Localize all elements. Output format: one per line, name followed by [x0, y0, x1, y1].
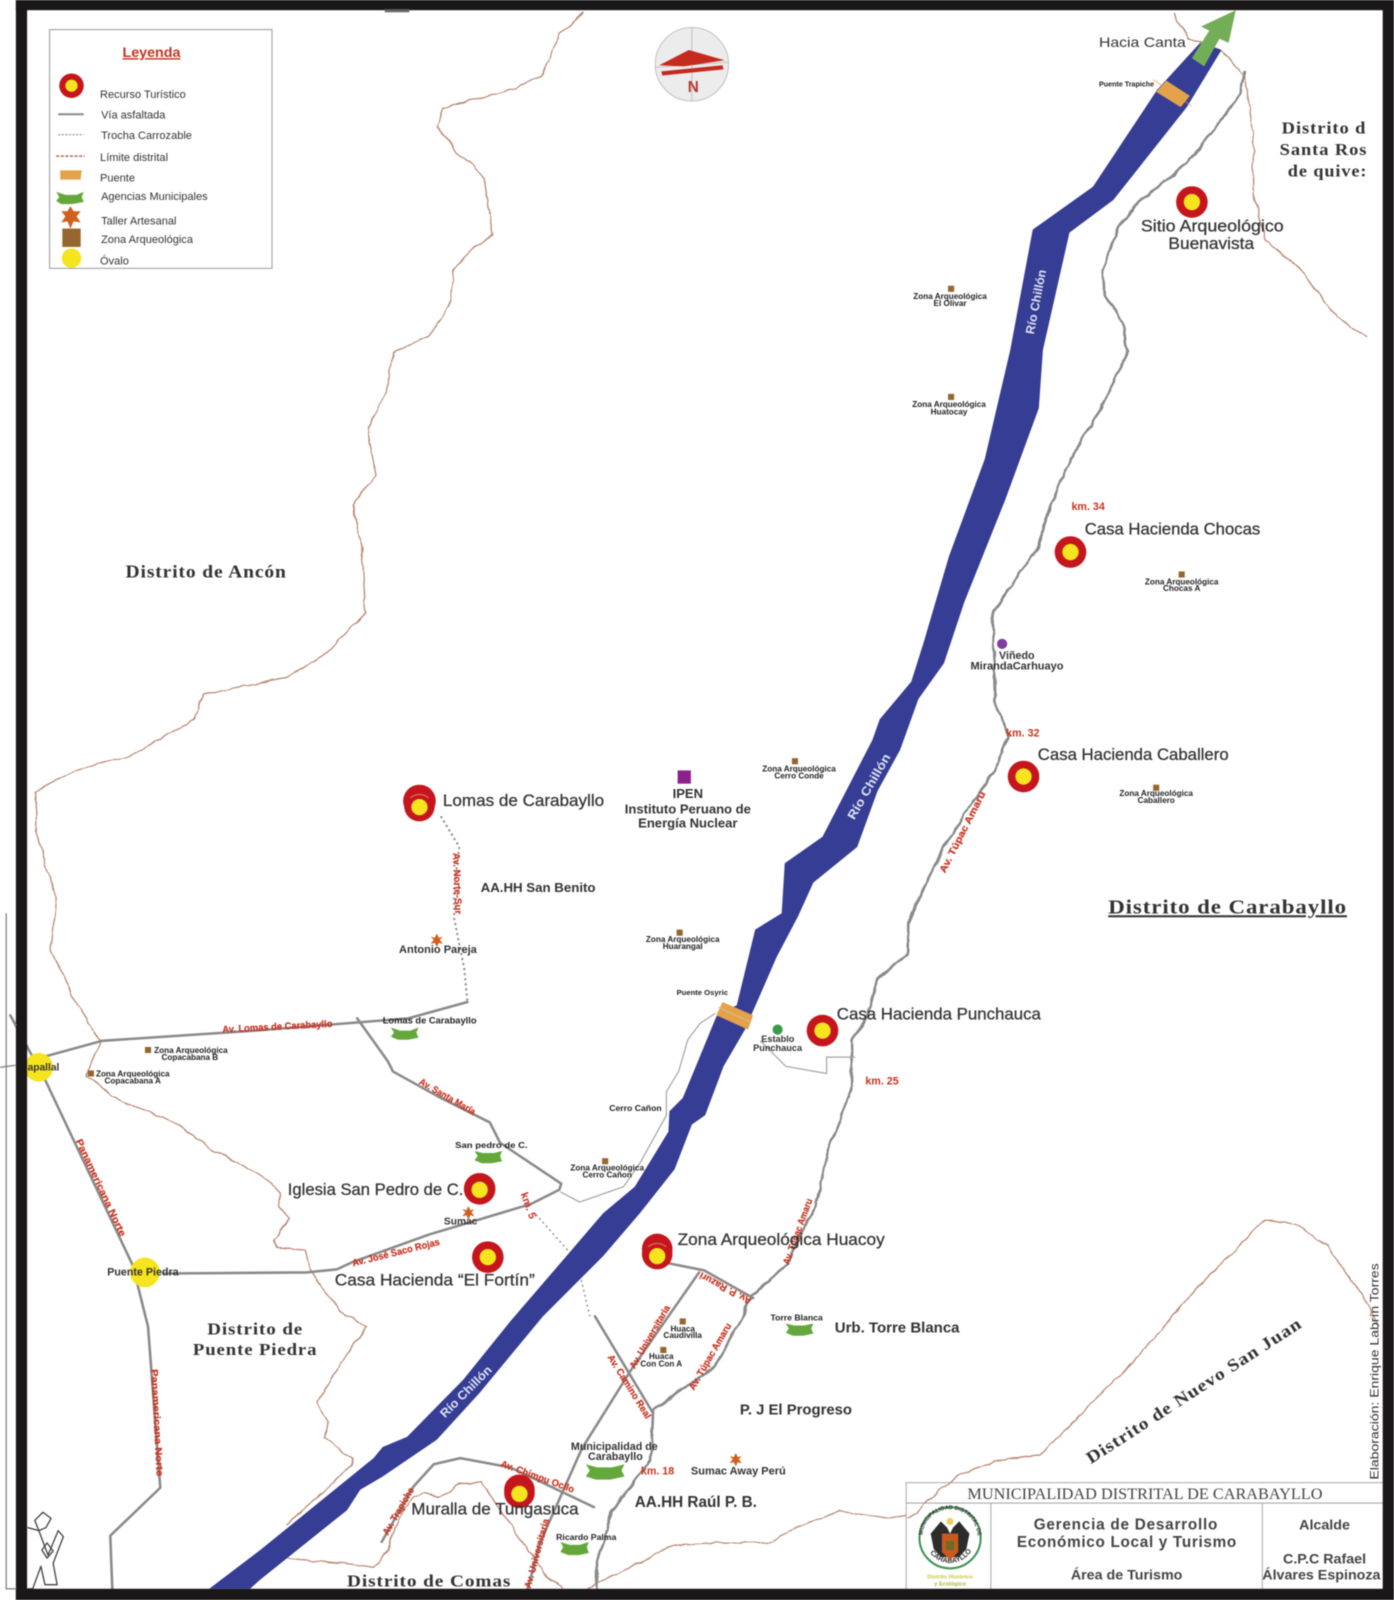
- river label centre: Río Chillón: [845, 751, 893, 822]
- legend: trocha carrozable: Trocha Carrozable: [101, 130, 192, 142]
- road labels: km. 18: [641, 1465, 674, 1477]
- municipal agencies: [383, 1015, 823, 1555]
- tourist resource: Chocas: Casa Hacienda Chocas: [1085, 521, 1260, 539]
- legend: límite distrital: Límite distrital: [100, 152, 168, 164]
- archaeological zones: [88, 286, 1219, 1368]
- Viñedo Miranda Carhuayo: MirandaCarhuayo: [970, 660, 1064, 672]
- Viñedo Miranda Carhuayo: [970, 639, 1064, 672]
- road labels: Panamericana Norte: [73, 1137, 128, 1239]
- agency: Municipalidad de Carabayllo: Municipalidad de: [571, 1441, 658, 1453]
- management heading: [1017, 1517, 1236, 1584]
- mayor details: Alcalde: [1299, 1518, 1350, 1534]
- road labels: [73, 501, 1105, 1590]
- workshops: [399, 934, 786, 1477]
- IPEN icon and label: [625, 770, 751, 831]
- legend: puente: [60, 170, 135, 185]
- logo: municipal shield: CARABAYLLO: [930, 1548, 972, 1564]
- agency: Lomas de Carabayllo: [383, 1015, 477, 1040]
- management heading: Gerencia de Desarrollo: [1034, 1517, 1217, 1534]
- road labels: Panamericana Norte: [148, 1369, 165, 1477]
- arrow: towards Canta: [1192, 10, 1236, 66]
- agency: Torre Blanca: Torre Blanca: [770, 1312, 823, 1322]
- district: Santa Rosa de Quives: Santa Ros: [1280, 140, 1367, 159]
- archaeological zones: Caudivilla: [663, 1331, 702, 1340]
- road labels: Av. Chimpu Ocllo: [499, 1459, 576, 1496]
- tourist resource: Tungasuca: Muralla de Tungasuca: [411, 1500, 580, 1518]
- legend: [50, 30, 272, 268]
- legend: óvalo: [62, 248, 129, 268]
- archaeological zones: Huaca: [670, 1325, 695, 1334]
- legend: vía asfaltada: [58, 109, 166, 121]
- tourist resource: Punchauca: [807, 1005, 1042, 1046]
- district: Santa Rosa de Quives: Distrito d: [1282, 119, 1366, 138]
- tourist resource: Lomas de Carabayllo: Lomas de Carabayllo: [443, 792, 604, 810]
- legend: taller artesanal: Taller Artesanal: [101, 215, 176, 227]
- tourist resource: Buenavista: [1141, 186, 1284, 253]
- district: Puente Piedra: Distrito de: [207, 1320, 303, 1339]
- district: Nuevo San Juan: Distrito de Nuevo San Juan: [1083, 1314, 1305, 1468]
- tourist resource: Huacoy: [642, 1231, 886, 1269]
- road labels: Av. Túpac Amaru: [938, 790, 988, 875]
- archaeological zones: Huarangal: [663, 942, 703, 951]
- ovalo: Capallal: apallal: [28, 1062, 59, 1073]
- Cerro Cañon: Cerro Cañon: [609, 1103, 662, 1113]
- workshop: Sumac Away Perú: Sumac Away Perú: [691, 1465, 786, 1477]
- logo: municipal shield: Distrito Histórico: [927, 1575, 973, 1581]
- road labels: Av. Camino Real: [605, 1353, 653, 1421]
- agency: San Pedro de C.: San pedro de C.: [455, 1140, 528, 1150]
- archaeological zones: Huaca: [649, 1352, 674, 1361]
- archaeological zones: Copacabana A: [105, 1077, 161, 1086]
- legend: vía asfaltada: Vía asfaltada: [101, 109, 166, 121]
- IPEN icon and label: Instituto Peruano de: [625, 801, 751, 816]
- archaeological zones: Caballero: [1138, 796, 1175, 805]
- road labels: Av. Universitaria: [523, 1517, 552, 1590]
- legend: agencias municipales: Agencias Municipales: [101, 191, 208, 203]
- tourist resource: Tungasuca: [411, 1474, 580, 1518]
- legend: recurso turístico: Recurso Turístico: [100, 89, 186, 101]
- tourist resource: El Fortín: [335, 1241, 535, 1290]
- road labels: Av. José Saco Rojas: [351, 1237, 441, 1269]
- archaeological zones: Chocas A: [1163, 584, 1200, 593]
- Urb. Torre Blanca: Urb. Torre Blanca: [835, 1320, 960, 1337]
- Establo Punchauca: Establo: [761, 1034, 795, 1044]
- archaeological zones: Huatocay: [931, 407, 968, 416]
- workshop: Sumac Away Perú: [691, 1453, 786, 1477]
- tourist resource: Caballero: Casa Hacienda Caballero: [1038, 746, 1229, 764]
- archaeological zones: Zona Arqueológica: [646, 935, 720, 944]
- legend: agencias municipales: [56, 191, 208, 204]
- agency: Municipalidad de Carabayllo: [571, 1441, 658, 1480]
- P. J El Progreso: P. J El Progreso: [740, 1402, 852, 1418]
- tourist resource: Buenavista: Buenavista: [1168, 235, 1255, 253]
- road labels: Av. Túpac Amaru: [781, 1197, 815, 1266]
- district: Comas: Distrito de Comas: [347, 1572, 511, 1591]
- archaeological zones: Zona Arqueológica: [912, 400, 986, 409]
- workshop: Sumac: [444, 1206, 478, 1227]
- road labels: Av. P. Razuri: [698, 1270, 754, 1306]
- mayor details: C.P.C Rafael: [1283, 1551, 1366, 1567]
- mayor details: [1262, 1518, 1382, 1584]
- road labels: km. 5: [518, 1191, 538, 1221]
- tourist resource: Punchauca: Casa Hacienda Punchauca: [837, 1005, 1042, 1023]
- workshop: Sumac: Sumac: [444, 1216, 478, 1227]
- author credit: Elaboración: Enrique Labrín Torres: [1369, 1263, 1382, 1480]
- bridge: Puente Osyric: Puente Osyric: [677, 988, 729, 997]
- legend: zona arqueológica: [62, 229, 194, 247]
- district: Santa Rosa de Quives: de quive:: [1288, 162, 1367, 181]
- road labels: Av. Norte-Sur: [450, 853, 463, 915]
- road labels: km. 34: [1071, 501, 1105, 513]
- road labels: Av. Trapiche: [381, 1485, 417, 1537]
- archaeological zones: Cerro Conde: [774, 772, 824, 781]
- archaeological zones: Zona Arqueológica: [1145, 578, 1219, 587]
- tourist resource: Iglesia San Pedro: Iglesia San Pedro de C.: [288, 1181, 463, 1199]
- ovalo: Puente Piedra: Puente Piedra: [107, 1267, 180, 1279]
- archaeological zones: Con Con A: [640, 1359, 682, 1368]
- tourist resource: Iglesia San Pedro: [288, 1173, 495, 1205]
- archaeological zones: Zona Arqueológica: [570, 1163, 644, 1172]
- legend: óvalo: Óvalo: [100, 254, 129, 267]
- district: Santa Rosa de Quives: [1280, 119, 1367, 181]
- river label north: Río Chillón: [1023, 268, 1049, 335]
- road labels: km. 32: [1006, 728, 1040, 740]
- district: Puente Piedra: Puente Piedra: [193, 1340, 317, 1359]
- mayor details: Álvares Espinoza: [1262, 1567, 1382, 1584]
- AA.HH San Benito: AA.HH San Benito: [481, 880, 596, 895]
- logo: municipal shield: y Ecológico: [934, 1582, 966, 1588]
- legend: límite distrital: [56, 152, 168, 164]
- agency: Municipalidad de Carabayllo: Carabayllo: [588, 1451, 643, 1463]
- bridge: Puente Trapiche: Puente Trapiche: [1099, 81, 1154, 89]
- legend title: Leyenda: [123, 45, 181, 61]
- logo: municipal shield: [918, 1504, 982, 1588]
- legend: puente: Puente: [100, 173, 135, 185]
- ovalo: Puente Piedra: [107, 1258, 180, 1287]
- Establo Punchauca: Punchauca: [753, 1043, 803, 1053]
- label: Hacia Canta: Hacia Canta: [1099, 35, 1186, 51]
- compass: north: N: [688, 79, 699, 96]
- archaeological zones: El Olivar: [934, 299, 967, 308]
- road labels: Av. Santa María: [417, 1077, 478, 1118]
- logo: municipal shield: MUNICIPALIDAD DISTRITAL DE: [918, 1504, 982, 1536]
- river label south: Río Chillón: [437, 1363, 495, 1420]
- frame: outer grey edge: [0, 913, 16, 1589]
- archaeological zones: Copacabana B: [162, 1053, 218, 1062]
- IPEN icon and label: IPEN: [673, 786, 703, 801]
- road labels: Av. Universitaria: [628, 1303, 673, 1371]
- AA.HH Raúl P. B.: AA.HH Raúl P. B.: [635, 1494, 757, 1511]
- archaeological zones: Zona Arqueológica: [762, 764, 836, 773]
- road labels: Av. Túpac Amaru: [687, 1321, 734, 1392]
- legend: trocha carrozable: [58, 130, 192, 142]
- workshop: Antonio Pareja: [399, 934, 478, 956]
- archaeological zones: Zona Arqueológica: [154, 1046, 228, 1055]
- icon: hiker: [28, 1512, 63, 1589]
- district: Puente Piedra: [193, 1320, 317, 1359]
- title block: [905, 1474, 1384, 1590]
- agency: Torre Blanca: [770, 1312, 823, 1336]
- IPEN icon and label: Energía Nuclear: [638, 816, 737, 831]
- archaeological zones: Zona Arqueológica: [1119, 789, 1193, 798]
- management heading: Área de Turismo: [1071, 1567, 1183, 1584]
- compass: north: [655, 28, 729, 101]
- bridge: Puente Osyric: [677, 988, 753, 1030]
- tourist resource: Buenavista: Sitio Arqueológico: [1141, 218, 1284, 236]
- archaeological zones: Cerro Cañon: [583, 1171, 632, 1180]
- archaeological zones: Zona Arqueológica: [913, 292, 987, 301]
- agency: Ricardo Palma: Ricardo Palma: [556, 1532, 617, 1542]
- archaeological zones: Zona Arqueológica: [96, 1070, 170, 1079]
- tourist resource: Caballero: [1008, 746, 1229, 792]
- legend: zona arqueológica: Zona Arqueológica: [101, 234, 194, 246]
- bridge: Puente Trapiche: [1099, 80, 1192, 107]
- road labels: km. 25: [865, 1076, 899, 1088]
- Establo Punchauca: [753, 1024, 803, 1053]
- ovalo: Capallal: [25, 1053, 59, 1082]
- municipality name: MUNICIPALIDAD DISTRITAL DE CARABAYLLO: [967, 1486, 1323, 1503]
- legend: taller artesanal: [61, 206, 176, 229]
- road labels: Av. Lomas de Carabayllo: [222, 1019, 333, 1036]
- district: Ancón: Distrito de Ancón: [126, 562, 287, 582]
- tourist resource: Huacoy: Zona Arqueológica Huacoy: [678, 1231, 886, 1249]
- tourist resource: Lomas de Carabayllo: [403, 785, 604, 821]
- management heading: Económico Local y Turismo: [1017, 1534, 1236, 1551]
- place labels: [481, 639, 1382, 1511]
- agency: San Pedro de C.: [455, 1140, 528, 1163]
- workshop: Antonio Pareja: Antonio Pareja: [399, 944, 478, 956]
- agency: Ricardo Palma: [556, 1532, 617, 1555]
- tourist resource: El Fortín: Casa Hacienda “El Fortín”: [335, 1272, 535, 1290]
- Viñedo Miranda Carhuayo: Viñedo: [999, 650, 1035, 662]
- river: Río Chillón: [209, 43, 1221, 1589]
- agency: Lomas de Carabayllo: Lomas de Carabayllo: [383, 1015, 477, 1025]
- district: Carabayllo: Distrito de Carabayllo: [1108, 896, 1347, 918]
- tourist resource: Chocas: [1055, 521, 1260, 568]
- legend: recurso turístico: [59, 73, 186, 101]
